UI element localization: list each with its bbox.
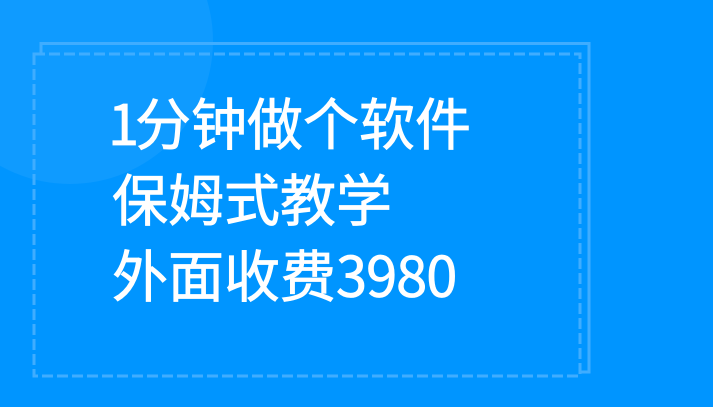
solid outer frame xyxy=(41,44,589,372)
title line 1: 分钟做个软件 xyxy=(135,81,471,162)
background circle xyxy=(0,0,213,184)
title line 3: 外面收费3980 xyxy=(112,233,456,314)
title line 1: 1 xyxy=(108,81,139,162)
title line 2: 保姆式教学 xyxy=(112,157,392,238)
dashed inner frame xyxy=(34,54,580,376)
